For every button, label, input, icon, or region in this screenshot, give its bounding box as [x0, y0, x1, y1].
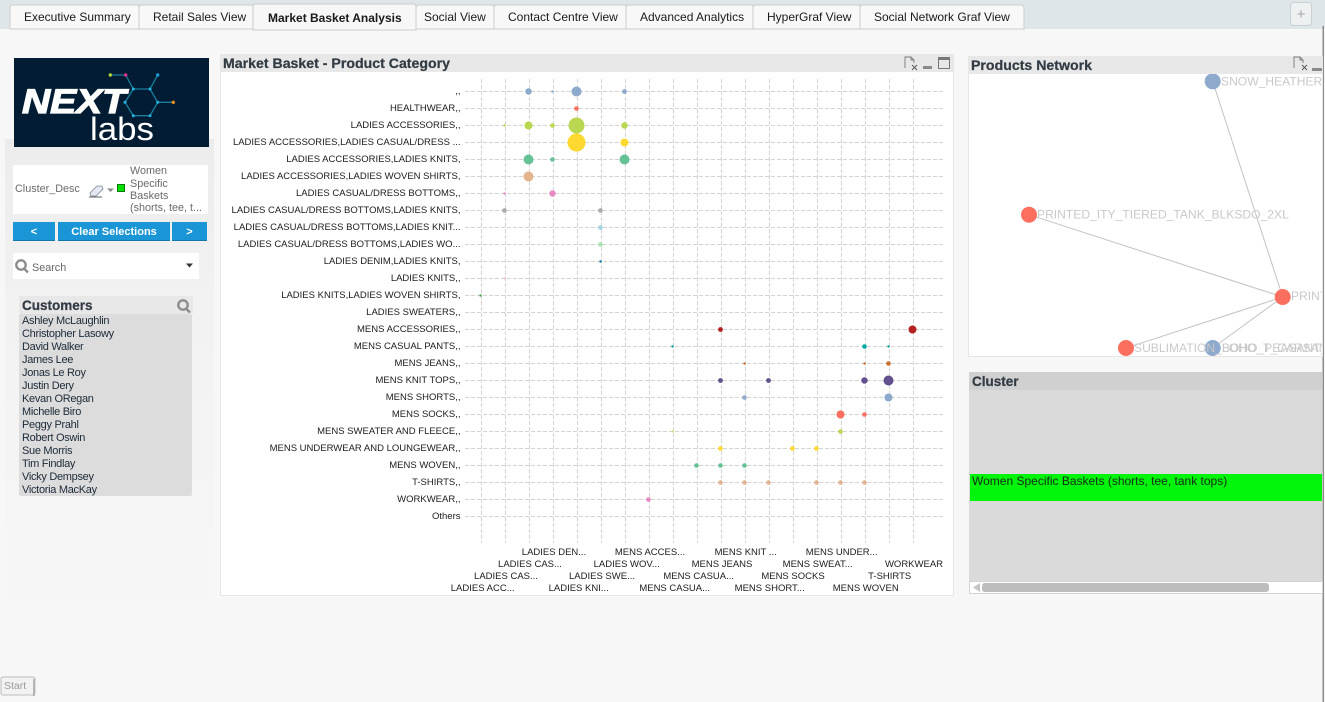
y axis labels: MENS JEANS,,	[394, 358, 460, 369]
x axis labels: LADIES SWE...	[569, 571, 635, 582]
bubbles	[479, 86, 916, 502]
logo: NEXT labs: labs	[90, 111, 154, 147]
panel: cluster	[969, 372, 1322, 594]
y axis labels: T-SHIRTS,,	[412, 477, 460, 488]
logo: NEXT labs: NEXT	[22, 83, 130, 121]
bubble chart grid	[465, 79, 945, 543]
y axis labels: MENS SHORTS,,	[386, 392, 460, 403]
icon: maximize	[938, 58, 950, 68]
customer names: James Lee	[22, 354, 73, 366]
y axis labels: LADIES CASUAL/DRESS BOTTOMS,,	[296, 188, 460, 199]
icon: magnifier	[16, 260, 28, 272]
start button	[1, 677, 35, 696]
x axis labels: MENS KNIT ...	[715, 547, 777, 558]
x axis labels: MENS SHORT...	[735, 583, 805, 594]
heading: market basket: Market Basket - Product Category	[223, 56, 451, 71]
network graph: PRINTED_ITY_TIERED_TANK_BLKSDO_2XL	[1037, 208, 1289, 222]
y axis labels: LADIES CASUAL/DRESS BOTTOMS,LADIES KNITS,	[232, 205, 460, 216]
heading: products network: Products Network	[971, 58, 1093, 73]
customer names: Justin Dery	[22, 380, 75, 392]
icon: minimize	[923, 66, 932, 69]
icon: customers search	[178, 300, 190, 312]
selected cluster row: Women Specific Baskets (shorts, tee, tank tops)	[972, 474, 1227, 488]
y axis labels: LADIES CASUAL/DRESS BOTTOMS,LADIES WO...	[238, 239, 460, 250]
x axis labels: T-SHIRTS	[868, 571, 911, 582]
button: clear selections: Clear Selections	[71, 226, 157, 238]
customer names: Ashley McLaughlin	[22, 315, 109, 327]
panel: customers list: Customers	[22, 298, 93, 313]
y axis labels: LADIES ACCESSORIES,LADIES CASUAL/DRESS ...	[233, 137, 460, 148]
customer names: Vicky Dempsey	[22, 471, 94, 483]
tab: HyperGraf View: HyperGraf View	[767, 10, 852, 24]
tab: Market Basket Analysis (active): Market Basket Analysis	[268, 11, 402, 25]
selected state swatch	[118, 184, 124, 192]
left sidebar background	[5, 139, 214, 629]
selected value text: Baskets	[130, 190, 169, 202]
x axis labels: LADIES KNI...	[549, 583, 609, 594]
selected value text: Specific	[130, 178, 168, 190]
x axis labels: MENS CASUA...	[663, 571, 734, 582]
tab: Advanced Analytics: Advanced Analytics	[640, 10, 744, 24]
current selection box: Cluster_Desc	[13, 165, 208, 214]
selected value text	[130, 165, 202, 214]
x axis labels: MENS UNDER...	[806, 547, 878, 558]
y axis labels: MENS SOCKS,,	[392, 409, 460, 420]
tab: Social Network Graf View: Social Network Graf View	[874, 10, 1010, 24]
customer names: Sue Morris	[22, 445, 73, 457]
x axis labels: LADIES CAS...	[498, 559, 562, 570]
network graph	[1021, 73, 1325, 356]
search box	[13, 253, 199, 279]
x axis labels: LADIES DEN...	[522, 547, 586, 558]
y axis labels: MENS SWEATER AND FLEECE,,	[317, 426, 460, 437]
x axis labels: LADIES CAS...	[474, 571, 538, 582]
icon: clear selection	[905, 57, 917, 70]
customer names: Robert Oswin	[22, 432, 85, 444]
button: previous	[13, 222, 55, 241]
tab: Executive Summary	[10, 5, 139, 29]
y axis labels: LADIES SWEATERS,,	[366, 307, 460, 318]
tab: Social Network Graf View	[860, 5, 1024, 29]
selected value text: (shorts, tee, t...	[130, 202, 202, 214]
customer names: Christopher Lasowy	[22, 328, 115, 340]
button: clear selections	[58, 222, 170, 241]
customer names: Tim Findlay	[22, 458, 76, 470]
icon: search dropdown caret	[186, 264, 193, 268]
x axis labels: MENS CASUA...	[639, 583, 710, 594]
customer names	[22, 315, 115, 496]
logo: NEXT labs	[14, 58, 209, 147]
tab: HyperGraf View	[753, 5, 860, 29]
selected value text: Women	[130, 165, 167, 177]
y axis labels: MENS ACCESSORIES,,	[357, 324, 460, 335]
tab: Social View: Social View	[424, 10, 486, 24]
y axis labels: LADIES ACCESSORIES,,	[351, 120, 460, 131]
x axis labels: MENS SOCKS	[761, 571, 825, 582]
customer names: Michelle Biro	[22, 406, 81, 418]
icon: eraser	[89, 186, 103, 197]
heading: cluster: Cluster	[972, 374, 1019, 389]
y axis labels: LADIES ACCESSORIES,LADIES KNITS,	[286, 154, 460, 165]
x axis labels: MENS SWEAT...	[783, 559, 853, 570]
x axis labels: WORKWEAR	[885, 559, 943, 570]
current selection box: Cluster_Desc: Cluster_Desc	[15, 183, 80, 195]
y axis labels: MENS KNIT TOPS,,	[376, 375, 460, 386]
scrollbar	[970, 582, 1322, 594]
add tab button: +	[1297, 6, 1306, 23]
button: next: >	[186, 226, 193, 238]
tab: Social View	[416, 5, 494, 29]
right edge line	[1322, 26, 1324, 702]
y axis labels: LADIES DENIM,LADIES KNITS,	[324, 256, 460, 267]
tab: Market Basket Analysis (active)	[253, 4, 416, 30]
y axis labels: WORKWEAR,,	[397, 494, 460, 505]
icon: network clear selection	[1294, 57, 1307, 70]
search box: Search	[32, 262, 66, 274]
y axis labels	[232, 86, 461, 522]
tab: Contact Centre View	[494, 5, 626, 29]
y axis labels: MENS UNDERWEAR AND LOUNGEWEAR,,	[270, 443, 460, 454]
add tab button	[1290, 2, 1312, 26]
customer names: Kevan ORegan	[22, 393, 94, 405]
x axis labels: MENS JEANS	[692, 559, 752, 570]
x axis labels: LADIES ACC...	[451, 583, 515, 594]
tab: Advanced Analytics	[626, 5, 753, 29]
tab: Retail Sales View: Retail Sales View	[153, 10, 246, 24]
panel: customers list	[19, 296, 193, 496]
y axis labels: LADIES ACCESSORIES,LADIES WOVEN SHIRTS,	[241, 171, 460, 182]
y axis labels: HEALTHWEAR,,	[390, 103, 460, 114]
tab: Contact Centre View: Contact Centre View	[508, 10, 618, 24]
x axis labels	[451, 547, 943, 594]
customer names: Peggy Prahl	[22, 419, 79, 431]
y axis labels: MENS CASUAL PANTS,,	[354, 341, 460, 352]
panel: market basket product category	[220, 54, 954, 596]
icon: dropdown caret	[107, 188, 114, 192]
y axis labels: LADIES KNITS,LADIES WOVEN SHIRTS,	[281, 290, 460, 301]
button: next	[172, 222, 207, 241]
start button: Start	[4, 680, 26, 692]
x axis labels: LADIES WOV...	[594, 559, 660, 570]
customer names: David Walker	[22, 341, 84, 353]
tab: Retail Sales View	[139, 5, 253, 29]
x axis labels: MENS ACCES...	[615, 547, 685, 558]
y axis labels: MENS WOVEN,,	[389, 460, 460, 471]
button: previous: <	[31, 226, 37, 238]
y axis labels: ,,	[455, 86, 460, 97]
tab: Executive Summary: Executive Summary	[24, 10, 131, 24]
y axis labels: LADIES CASUAL/DRESS BOTTOMS,LADIES KNIT...	[234, 222, 460, 233]
customer names: Victoria MacKay	[22, 484, 98, 496]
panel: products network	[968, 56, 1325, 356]
x axis labels: MENS WOVEN	[833, 583, 899, 594]
tab bar	[0, 0, 1325, 30]
y axis labels: Others	[432, 511, 461, 522]
selected cluster row	[970, 474, 1322, 501]
y axis labels: LADIES KNITS,,	[391, 273, 460, 284]
customer names: Jonas Le Roy	[22, 367, 86, 379]
icon: network minimize	[1312, 68, 1322, 71]
